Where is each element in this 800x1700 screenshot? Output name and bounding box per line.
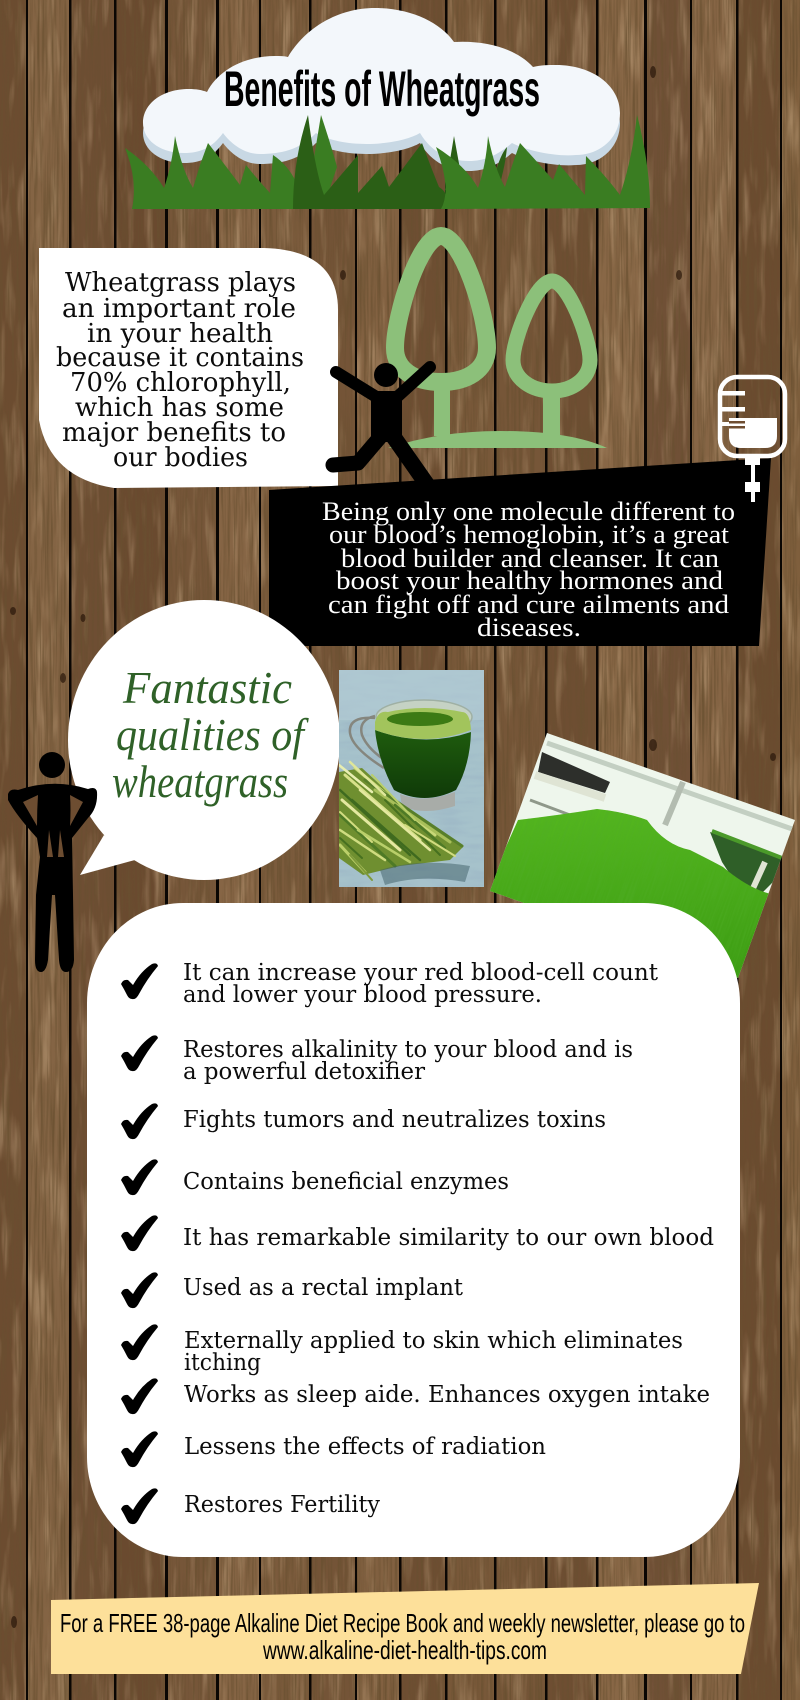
panel text: diseases. <box>477 613 581 642</box>
icon: jumping person <box>333 363 430 486</box>
script heading: Fantastic <box>122 662 292 713</box>
benefit statements: It has remarkable similarity to our own blood <box>183 1225 714 1251</box>
intro text: 70% chlorophyll, <box>70 368 291 398</box>
panel: benefits list <box>87 903 740 1557</box>
panel: black hemoglobin panel <box>269 458 771 646</box>
photo: wheatgrass juice <box>339 670 484 887</box>
benefit statements: Restores alkalinity to your blood and is <box>183 1037 633 1063</box>
benefit statements: and lower your blood pressure. <box>183 982 542 1008</box>
footer banner <box>51 1583 759 1674</box>
panel text: blood builder and cleanser. It can <box>341 544 719 573</box>
icon: person with hands behind head <box>8 752 97 972</box>
benefit statements: Lessens the effects of radiation <box>184 1434 546 1460</box>
grass <box>125 115 650 209</box>
checkmarks <box>121 963 158 1524</box>
panel text: boost your healthy hormones and <box>336 566 723 595</box>
icon: IV bag <box>720 377 785 502</box>
panel text: our blood’s hemoglobin, it’s a great <box>329 520 730 549</box>
benefit statements: Used as a rectal implant <box>183 1275 464 1301</box>
intro text: which has some <box>75 393 284 423</box>
benefit statements: Works as sleep aide. Enhances oxygen intake <box>184 1382 710 1408</box>
benefit statements <box>183 960 714 1518</box>
benefit statements: It can increase your red blood-cell count <box>183 960 659 986</box>
intro text: our bodies <box>113 443 248 473</box>
intro text: because it contains <box>56 343 304 373</box>
intro text <box>56 268 304 473</box>
panel text <box>322 497 735 642</box>
speech bubble: fantastic qualities <box>68 600 340 880</box>
intro text: major benefits to <box>62 418 286 448</box>
benefit statements: itching <box>184 1350 261 1376</box>
benefit statements: Restores Fertility <box>184 1492 380 1518</box>
benefit statements: Fights tumors and neutralizes toxins <box>183 1107 606 1133</box>
title cloud <box>143 8 620 171</box>
benefit statements: a powerful detoxifier <box>183 1059 425 1085</box>
intro text: in your health <box>87 319 273 349</box>
title: Benefits of Wheatgrass <box>224 61 540 117</box>
photo: wheatgrass field <box>490 733 795 978</box>
panel text: can fight off and cure ailments and <box>328 590 729 619</box>
benefit statements: Externally applied to skin which eliminates <box>184 1328 683 1354</box>
benefit statements: Contains beneficial enzymes <box>183 1169 509 1195</box>
bubble: intro <box>39 248 338 488</box>
icon: trees <box>388 236 607 448</box>
footer banner: www.alkaline-diet-health-tips.com <box>262 1635 547 1665</box>
intro text: an important role <box>62 294 296 324</box>
script heading: qualities of <box>116 709 310 760</box>
script heading: wheatgrass <box>112 756 288 807</box>
script heading <box>112 662 310 807</box>
intro text: Wheatgrass plays <box>65 268 296 298</box>
panel text: Being only one molecule different to <box>322 497 735 526</box>
